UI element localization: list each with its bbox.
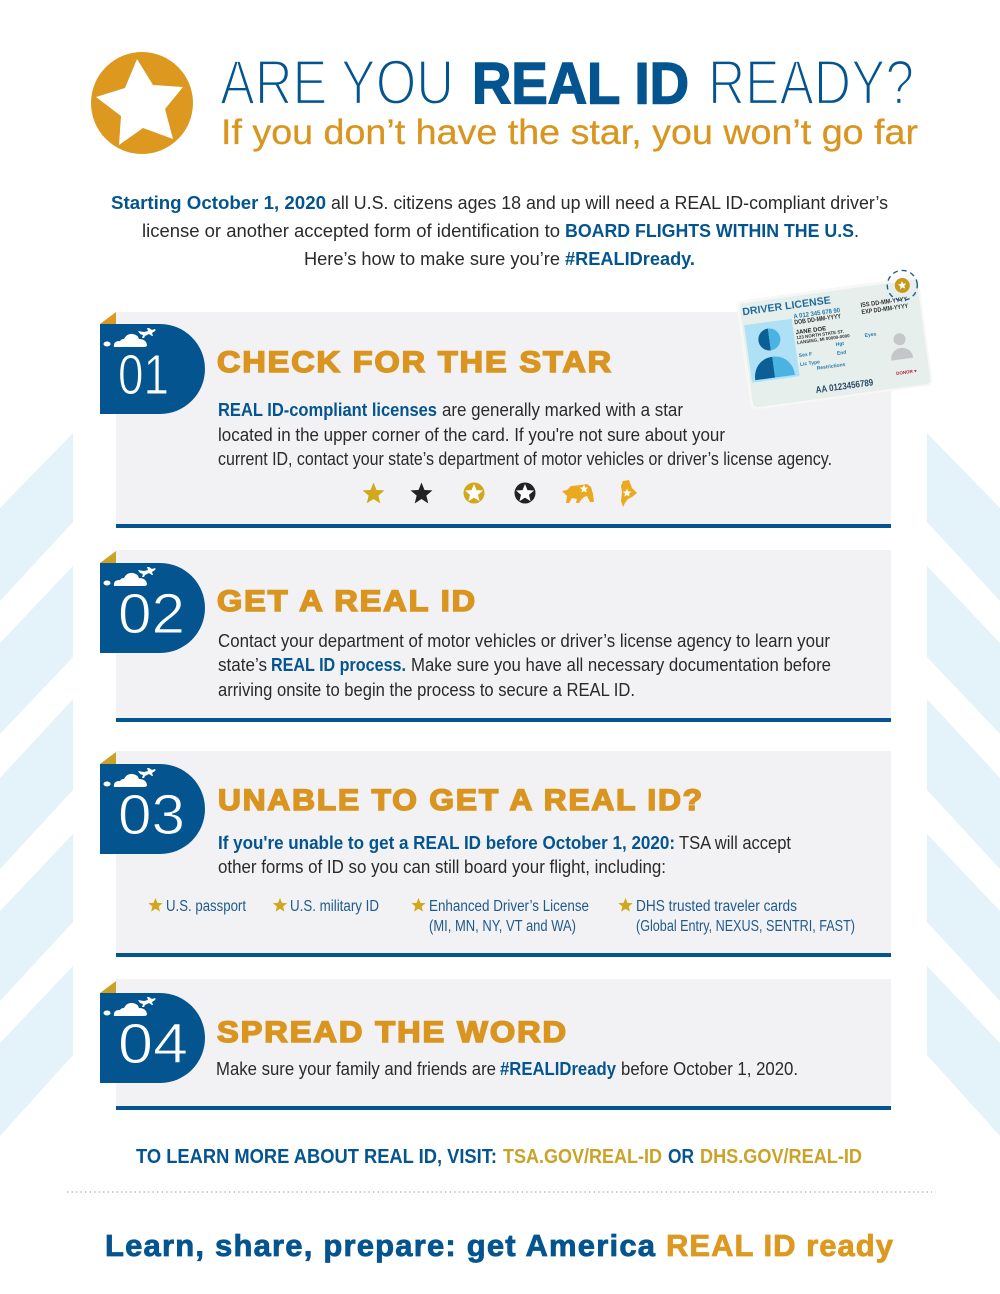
driver license card: A 012 345 678 90 (793, 307, 841, 320)
driver license card: Lic Type (800, 359, 820, 368)
heading: UNABLE TO GET A REAL ID? (218, 784, 704, 817)
driver license card: DOB DD-MM-YYYY (794, 313, 842, 326)
badge 04: 04 (118, 1012, 188, 1076)
body text: REAL ID process. (271, 655, 406, 675)
heading: SPREAD THE WORD (217, 1016, 568, 1049)
intro text: . (854, 221, 859, 241)
body text: Contact your department of motor vehicles or driver’s license agency to learn your (218, 631, 830, 651)
intro text: all U.S. citizens ages 18 and up will need a REAL ID-compliant driver’s (331, 193, 888, 213)
icons: star markings (363, 480, 637, 507)
learn more links: TSA.GOV/REAL-ID (503, 1146, 662, 1168)
driver license card: DRIVER LICENSE (742, 294, 831, 318)
panel: unable to get a real id (100, 751, 891, 957)
driver license card: Hgt (835, 341, 845, 348)
learn more links: DHS.GOV/REAL-ID (700, 1146, 862, 1168)
title: READY? (708, 48, 914, 118)
badge 01: 01 (118, 343, 169, 407)
list: accepted IDs: DHS trusted traveler cards (636, 898, 797, 915)
list: accepted IDs: (MI, MN, NY, VT and WA) (429, 918, 576, 935)
list: accepted IDs: Enhanced Driver’s License (429, 898, 589, 915)
panel: get a real id (100, 550, 891, 722)
body text: state’s (218, 655, 267, 675)
icon: gold star logo (91, 52, 193, 154)
list: accepted IDs (148, 898, 855, 935)
intro text: #REALIDready. (565, 249, 695, 269)
learn more links (136, 1146, 862, 1168)
body text: current ID, contact your state’s department of motor vehicles or driver’s license agency. (218, 449, 832, 469)
body text (216, 1059, 798, 1079)
body text (218, 833, 791, 877)
body text: before October 1, 2020. (621, 1059, 798, 1079)
driver license card: AA 0123456789 (815, 377, 874, 396)
body text: REAL ID-compliant licenses (218, 400, 437, 420)
closing tagline: Learn, share, prepare: get America (105, 1228, 656, 1263)
body text: other forms of ID so you can still board your flight, including: (218, 857, 666, 877)
driver license card: End (837, 350, 847, 357)
learn more links: OR (668, 1146, 694, 1168)
body text: are generally marked with a star (442, 400, 683, 420)
driver license card: DONOR ♥ (896, 368, 917, 376)
title (220, 48, 914, 118)
badge 02: 02 (118, 582, 185, 646)
panel: check for the star (100, 312, 891, 528)
intro text: Starting October 1, 2020 (111, 193, 326, 213)
intro text: Here’s how to make sure you’re (304, 249, 560, 269)
body text: TSA will accept (679, 833, 791, 853)
closing tagline: REAL ID ready (666, 1228, 894, 1263)
driver license card: LANSING, MI 00000-0000 (797, 333, 850, 345)
driver license card: 123 NORTH STATE ST. (796, 329, 844, 340)
badge 03 (100, 752, 205, 854)
learn more links: TO LEARN MORE ABOUT REAL ID, VISIT: (136, 1146, 497, 1168)
driver license card: ISS DD-MM-YYYY (860, 296, 908, 309)
title: ARE YOU (220, 48, 454, 118)
heading: GET A REAL ID (217, 585, 477, 618)
badge 03: 03 (118, 783, 185, 847)
driver license card: JANE DOE (795, 326, 827, 336)
closing tagline (105, 1228, 894, 1263)
body text (218, 400, 832, 469)
subtitle: If you don’t have the star, you won’t go far (221, 113, 918, 152)
body text: Make sure your family and friends are (216, 1059, 496, 1079)
body text: If you're unable to get a REAL ID before October 1, 2020: (218, 833, 675, 853)
intro text: BOARD FLIGHTS WITHIN THE U.S (565, 221, 854, 241)
body text: Make sure you have all necessary documentation before (411, 655, 831, 675)
body text (218, 631, 831, 700)
panel: spread the word (100, 979, 891, 1110)
list: accepted IDs: U.S. passport (166, 898, 247, 915)
title: REAL ID (472, 52, 689, 116)
driver license card: Eyes (864, 331, 877, 339)
body text: #REALIDready (500, 1059, 616, 1079)
intro text: license or another accepted form of identification to (142, 221, 560, 241)
body text: arriving onsite to begin the process to secure a REAL ID. (218, 680, 635, 700)
list: accepted IDs: (Global Entry, NEXUS, SENTRI, FAST) (636, 918, 855, 935)
badge 01 (100, 312, 205, 414)
intro text (111, 193, 888, 269)
driver license card: EXP DD-MM-YYYY (861, 303, 909, 316)
driver license card: Sex F (799, 351, 813, 359)
driver license card: Restrictions (816, 362, 846, 372)
badge 04 (100, 981, 205, 1083)
list: accepted IDs: U.S. military ID (290, 898, 379, 915)
driver license card (735, 268, 933, 410)
heading: CHECK FOR THE STAR (217, 346, 613, 379)
badge 02 (100, 551, 205, 653)
body text: located in the upper corner of the card. If you're not sure about your (218, 425, 725, 445)
